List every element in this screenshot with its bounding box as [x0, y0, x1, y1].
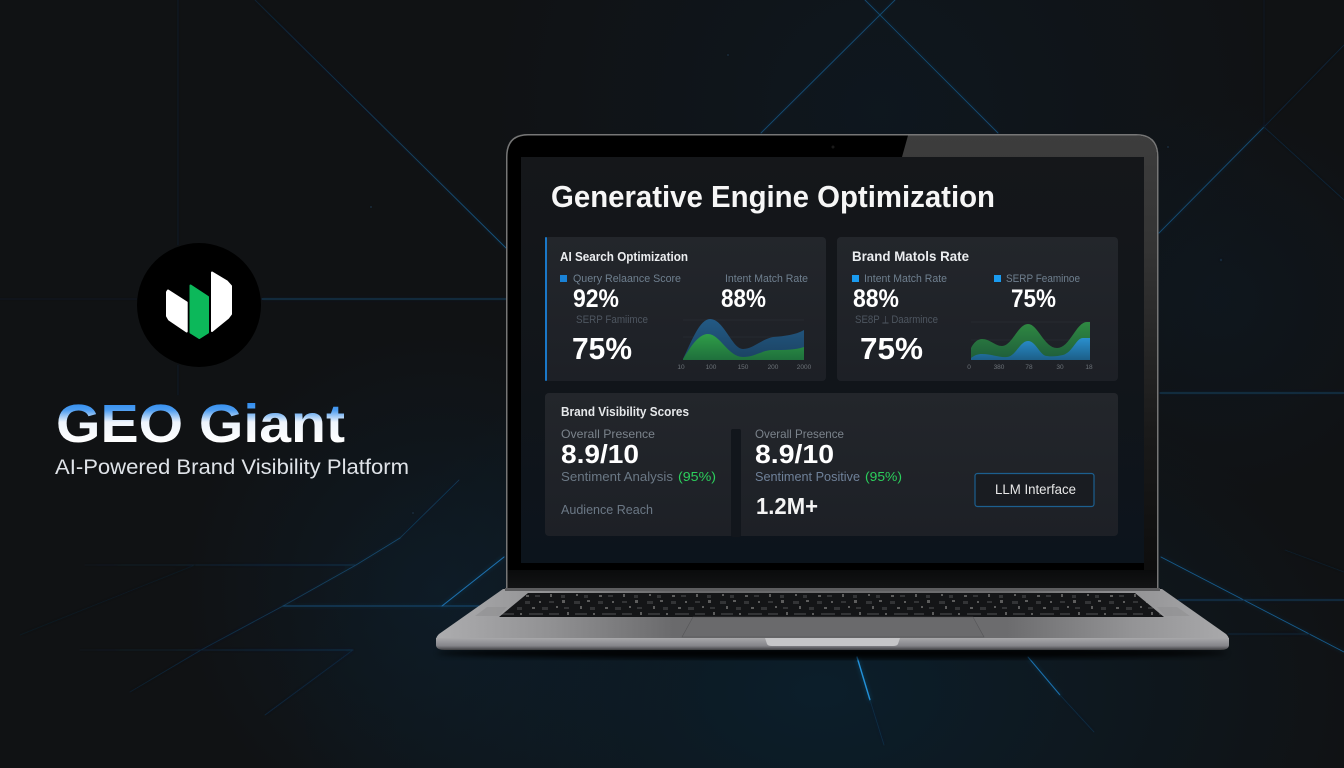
area chart: 78 — [1025, 364, 1033, 371]
area chart: 380 — [994, 364, 1005, 371]
panel heading: Brand Visibility Scores — [561, 405, 689, 419]
metric label: Intent Match Rate — [725, 273, 808, 285]
area chart: 10 — [677, 364, 685, 371]
right score column: (95%) — [865, 469, 902, 484]
metric value: 88% — [721, 285, 766, 313]
metric value: 75% — [1011, 285, 1056, 313]
right score column: 8.9/10 — [755, 439, 834, 469]
metric label: SERP Feaminoe — [1006, 273, 1080, 285]
left score column: Overall Presence — [561, 427, 655, 441]
icon: logo left white bar — [167, 290, 187, 332]
panel divider — [731, 429, 741, 537]
left score column: (95%) — [678, 469, 716, 484]
metric value: 75% — [860, 331, 923, 366]
laptop base — [436, 588, 1229, 650]
button: LLM Interface — [975, 474, 1094, 506]
keyboard — [499, 593, 1164, 617]
icon: logo green bar — [190, 286, 208, 338]
panel: Brand Match Rate — [837, 237, 1118, 381]
screen — [521, 157, 1144, 563]
base deck — [436, 589, 1229, 640]
area chart: 18 — [1085, 364, 1093, 371]
right score column — [755, 427, 902, 519]
left score column: Sentiment Analysis — [561, 469, 673, 484]
panel heading: Brand Matols Rate — [852, 248, 969, 264]
legend marker — [560, 275, 567, 282]
area chart: 0 — [967, 364, 971, 371]
panel heading: AI Search Optimization — [560, 249, 688, 264]
area chart — [677, 319, 812, 371]
front lip — [436, 638, 1229, 650]
metric label: Query Relaance Score — [573, 273, 681, 285]
brand name: GEO Giant — [56, 394, 345, 454]
laptop shadow — [437, 647, 1227, 659]
right score column: 1.2M+ — [756, 493, 818, 519]
thumb notch — [765, 638, 900, 646]
trackpad — [682, 617, 984, 637]
screen title: Generative Engine Optimization — [551, 179, 995, 214]
right score column: Overall Presence — [755, 427, 844, 441]
panel: Brand Visibility Scores — [545, 393, 1118, 537]
area chart: 30 — [1056, 364, 1064, 371]
metric value: 88% — [853, 285, 899, 313]
metric label: SERP Famiimce — [576, 314, 648, 326]
area chart: 150 — [738, 364, 749, 371]
left score column: 8.9/10 — [561, 439, 639, 469]
metric label: Intent Match Rate — [864, 273, 947, 285]
brand tagline: AI-Powered Brand Visibility Platform — [55, 455, 409, 479]
area chart: 200 — [768, 364, 779, 371]
left score column: Audience Reach — [561, 502, 653, 517]
laptop lid — [506, 134, 1158, 592]
hinge strip — [505, 588, 1160, 591]
area chart — [967, 322, 1093, 371]
side speaker grilles — [475, 607, 1190, 616]
legend marker — [994, 275, 1001, 282]
panel: AI Search Optimization — [545, 237, 826, 381]
icon: logo right white bar — [212, 272, 231, 331]
camera — [832, 146, 834, 148]
left score column — [561, 427, 716, 517]
laptop — [436, 134, 1229, 659]
legend marker — [852, 275, 859, 282]
area chart: 100 — [706, 364, 717, 371]
bezel reflection — [902, 136, 1157, 590]
logo badge — [137, 243, 261, 367]
area chart: 2000 — [797, 364, 812, 371]
metric value: 75% — [572, 331, 632, 366]
metric label: SE8P ⟂ Daarmince — [855, 314, 938, 326]
button: LLM Interface: LLM Interface — [995, 482, 1076, 497]
right score column: Sentiment Positive — [755, 469, 860, 484]
bezel chin — [508, 570, 1157, 590]
metric value: 92% — [573, 285, 619, 313]
